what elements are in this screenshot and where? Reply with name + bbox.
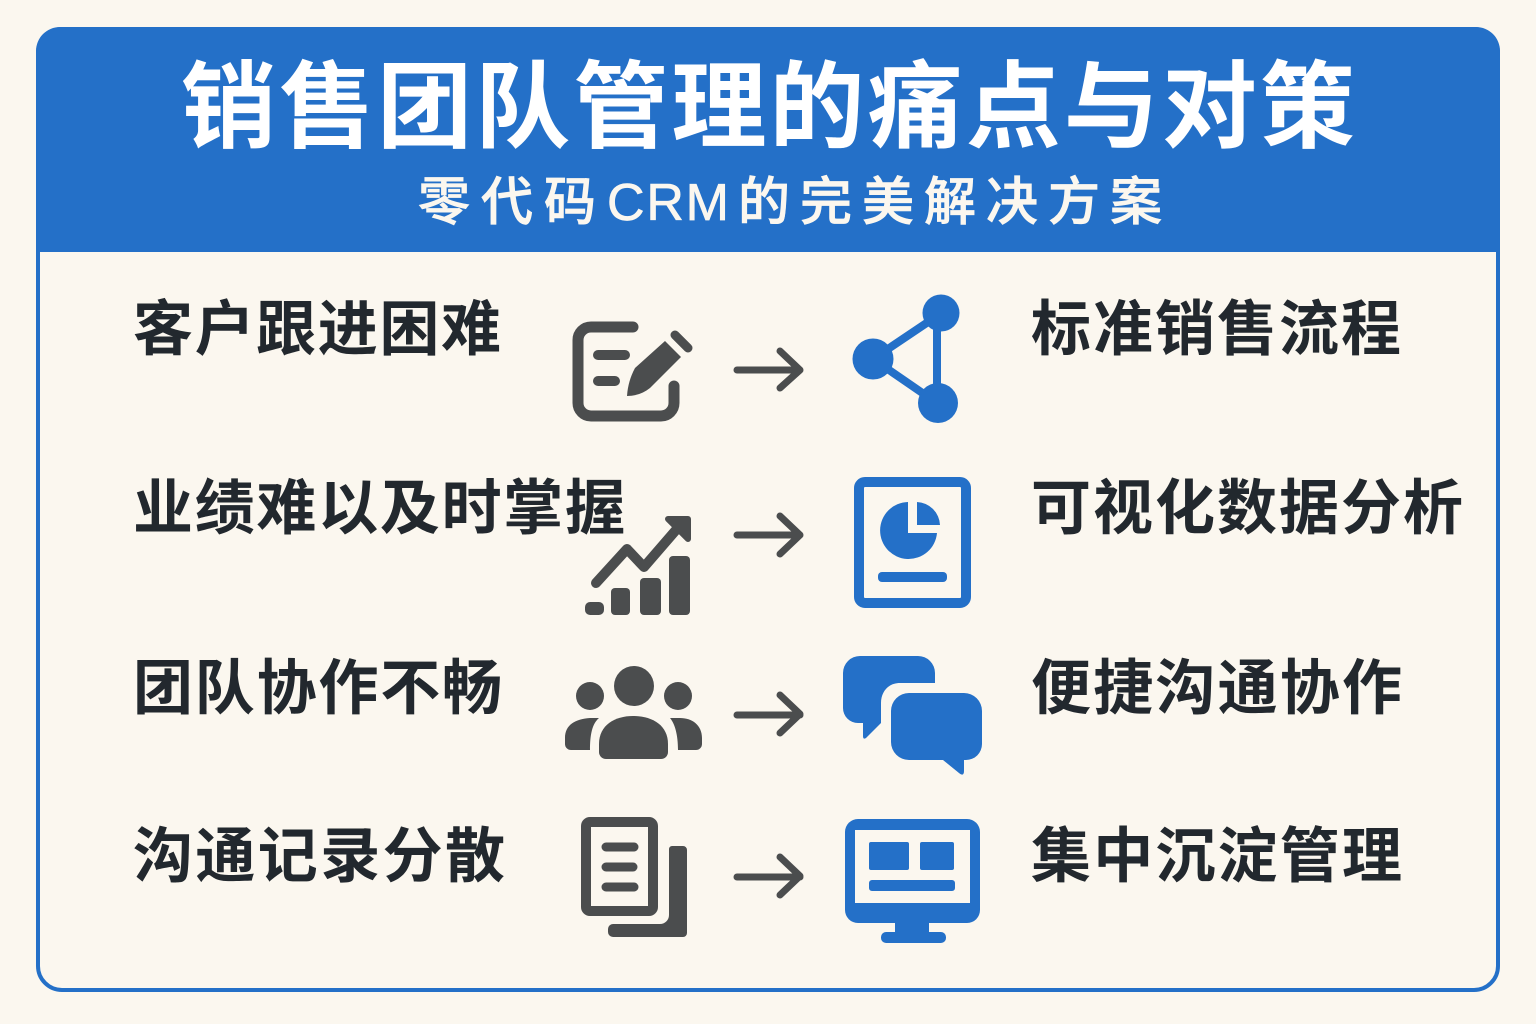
arrow 2: [737, 516, 800, 554]
arrow 4: [737, 857, 800, 895]
solution 2: 可视化数据分析: [1031, 475, 1463, 542]
icon: monitor: [845, 819, 980, 943]
subtitle: 零代码: [418, 174, 596, 232]
pain point 3: 团队协作不畅: [133, 655, 502, 722]
subtitle: 的完美解决方案: [738, 174, 1162, 232]
subtitle: [418, 174, 1162, 232]
arrow 1: [737, 351, 800, 388]
header band: [36, 27, 1500, 252]
icon: documents: [586, 822, 687, 937]
title: 销售团队管理的痛点与对策: [181, 55, 1355, 161]
icon: chat bubbles: [843, 656, 982, 775]
subtitle: CRM: [607, 174, 729, 232]
pain point 2: 业绩难以及时掌握: [133, 475, 625, 542]
solution 1: 标准销售流程: [1031, 296, 1401, 363]
solution 3: 便捷沟通协作: [1031, 655, 1402, 722]
icon: process nodes: [852, 294, 960, 423]
icon: report with pie chart: [859, 482, 966, 603]
pain point 4: 沟通记录分散: [133, 823, 505, 890]
icon: edit document: [578, 327, 688, 416]
solution 4: 集中沉淀管理: [1031, 823, 1402, 890]
arrow 3: [737, 695, 800, 733]
icon: growth chart: [585, 519, 690, 615]
icon: team: [565, 666, 702, 759]
pain point 1: 客户跟进困难: [133, 296, 501, 363]
